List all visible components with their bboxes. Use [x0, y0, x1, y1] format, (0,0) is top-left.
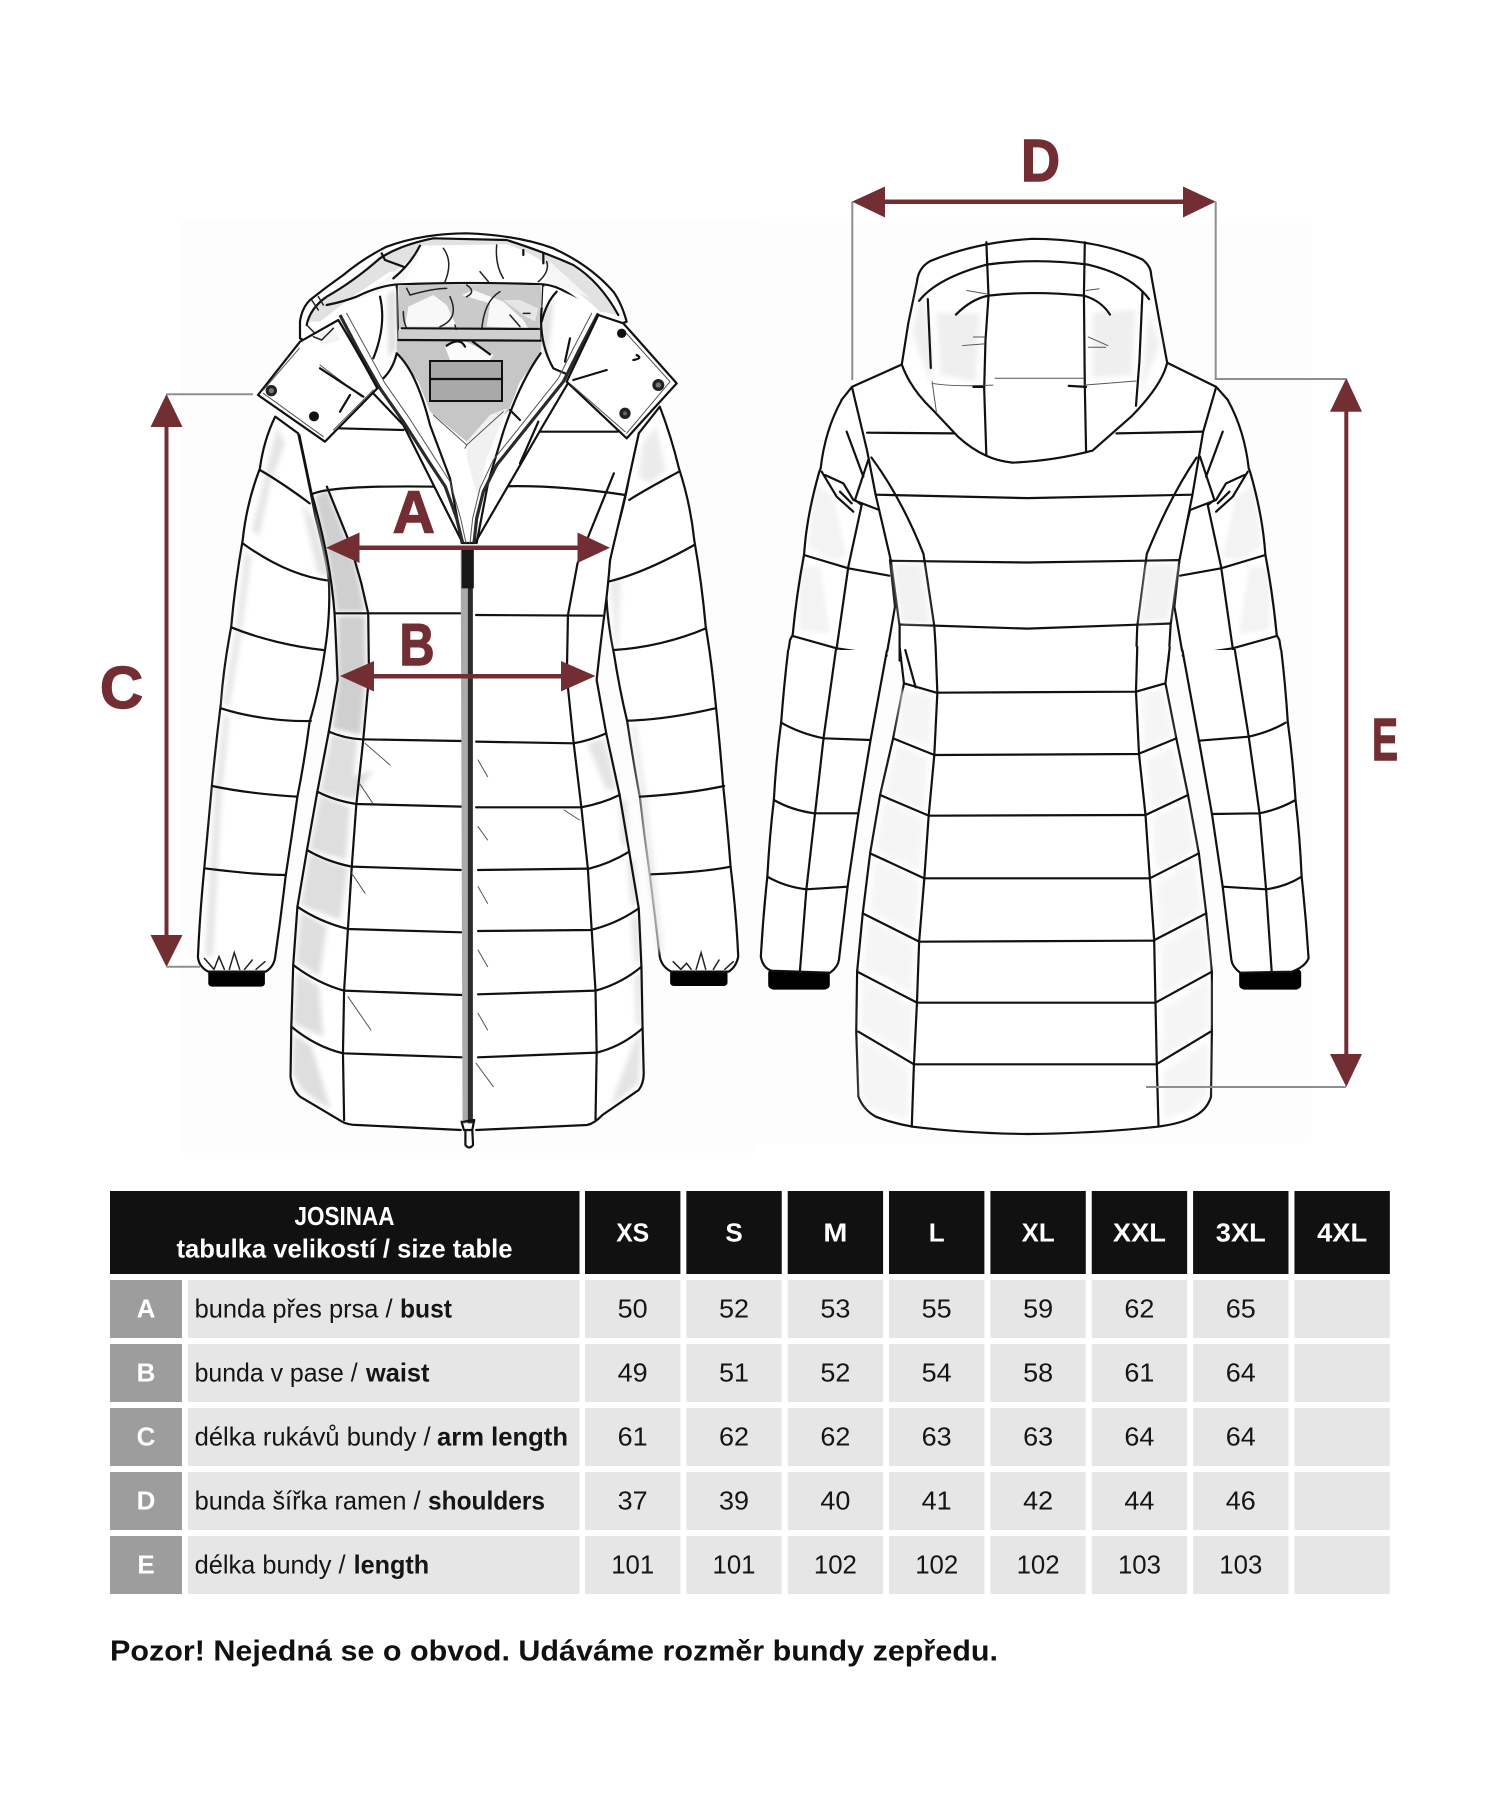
left collar flap [258, 320, 377, 442]
row B: waist [110, 1344, 1390, 1402]
letter B: B [400, 612, 434, 678]
back body upper [842, 363, 1228, 661]
neck label [430, 361, 502, 401]
row C: arm length: 64 [1226, 1422, 1256, 1452]
row D: shoulders: 40 [820, 1486, 850, 1516]
back left cuff [768, 968, 830, 990]
row B: waist: 54 [922, 1358, 952, 1388]
table header: XXL [1113, 1217, 1166, 1247]
jacket body [291, 387, 644, 1130]
row B: waist: 58 [1023, 1358, 1053, 1388]
left sleeve [198, 417, 329, 972]
back view of jacket, upper [842, 239, 1228, 661]
row C: arm length: 62 [719, 1422, 749, 1452]
back right sleeve lower [1182, 650, 1309, 973]
row A: bust: bunda přes prsa / [195, 1294, 393, 1324]
row E: length: 103 [1219, 1550, 1262, 1580]
row E: length: délka bundy / [195, 1550, 346, 1580]
row B: waist: B [137, 1358, 155, 1388]
right sleeve [606, 407, 738, 972]
row E: length: length [354, 1550, 429, 1580]
row C: arm length: délka rukávů bundy / [195, 1422, 431, 1452]
footnote: Pozor! Nejedná se o obvod. Udáváme rozměr bundy zepředu. [110, 1636, 998, 1668]
table header: 4XL [1317, 1217, 1367, 1247]
row C: arm length: C [137, 1422, 156, 1452]
row E: length [110, 1536, 1390, 1594]
letter D: D [1021, 128, 1060, 194]
row E: length: 101 [712, 1550, 756, 1580]
row E: length: 101 [611, 1550, 654, 1580]
inner collar lobes [340, 287, 598, 382]
table header: S [725, 1217, 743, 1247]
row B: waist: 52 [820, 1358, 850, 1388]
row C: arm length: arm length [437, 1422, 568, 1452]
back view of jacket, lower [761, 647, 1309, 1134]
measurement E: length arrow [1146, 378, 1362, 1087]
row D: shoulders: shoulders [428, 1486, 545, 1516]
row E: length: 103 [1118, 1550, 1161, 1580]
back view: right sleeve upper [1174, 400, 1281, 657]
table header: M [823, 1217, 847, 1247]
measurement D: shoulder arrow [852, 186, 1346, 380]
row B: waist: 49 [618, 1358, 648, 1388]
row B: waist: 64 [1226, 1358, 1256, 1388]
left cuff [208, 967, 265, 987]
table header: 3XL [1216, 1217, 1266, 1247]
hood back [902, 239, 1167, 463]
row B: waist: waist [365, 1358, 430, 1388]
row B: waist: bunda v pase / [195, 1358, 358, 1388]
row D: shoulders: 41 [922, 1486, 952, 1516]
table header: tabulka velikostí / size table [176, 1234, 512, 1264]
row D: shoulders: 39 [719, 1486, 749, 1516]
table header: XS [616, 1217, 649, 1247]
row A: bust: 65 [1226, 1294, 1256, 1324]
measurement C: arm length arrow [150, 394, 253, 967]
row C: arm length [110, 1408, 1390, 1466]
row A: bust: 62 [1124, 1294, 1154, 1324]
front view of puffer jacket [198, 387, 738, 1147]
collar edges and upper zipper [340, 313, 598, 543]
row E: length: 102 [1017, 1550, 1060, 1580]
letter A: A [393, 480, 435, 546]
row C: arm length: 63 [1023, 1422, 1053, 1452]
table header: JOSINAA [294, 1201, 395, 1231]
row B: waist: 51 [719, 1358, 749, 1388]
measurement B: waist arrow [340, 661, 596, 692]
row A: bust: 52 [719, 1294, 749, 1324]
row D: shoulders: bunda šířka ramen / [195, 1486, 421, 1516]
row B: waist: 61 [1124, 1358, 1154, 1388]
back left sleeve lower [761, 650, 887, 973]
letter E: E [1372, 707, 1398, 773]
hood shell [300, 233, 627, 543]
hood lining folds [397, 245, 547, 340]
row C: arm length: 63 [922, 1422, 952, 1452]
row D: shoulders: 37 [618, 1486, 648, 1516]
row C: arm length: 64 [1124, 1422, 1154, 1452]
row A: bust [110, 1280, 1390, 1338]
table header: XL [1022, 1217, 1055, 1247]
row A: bust: 59 [1023, 1294, 1053, 1324]
row A: bust: bust [400, 1294, 452, 1324]
row D: shoulders: 46 [1226, 1486, 1256, 1516]
row E: length: 102 [915, 1550, 958, 1580]
hood, collar and lining of front view [258, 233, 677, 543]
row E: length: E [137, 1550, 155, 1580]
row C: arm length: 61 [618, 1422, 648, 1452]
back view: left sleeve upper [788, 400, 895, 657]
back right cuff [1239, 968, 1301, 990]
row A: bust: 53 [820, 1294, 850, 1324]
row D: shoulders [110, 1472, 1390, 1530]
table header: L [929, 1217, 945, 1247]
table header [110, 1191, 1390, 1274]
row D: shoulders: D [137, 1486, 155, 1516]
right collar flap [567, 315, 677, 438]
row C: arm length: 62 [820, 1422, 850, 1452]
row D: shoulders: 44 [1124, 1486, 1154, 1516]
row A: bust: 50 [618, 1294, 648, 1324]
row A: bust: 55 [922, 1294, 952, 1324]
letter C: C [100, 655, 143, 721]
right cuff [670, 967, 728, 986]
inner back panel [397, 330, 542, 498]
measurement A: bust arrow [326, 532, 610, 563]
row A: bust: A [137, 1294, 156, 1324]
zipper [462, 547, 474, 1147]
row E: length: 102 [814, 1550, 857, 1580]
row D: shoulders: 42 [1023, 1486, 1053, 1516]
back body lower [856, 647, 1212, 1134]
